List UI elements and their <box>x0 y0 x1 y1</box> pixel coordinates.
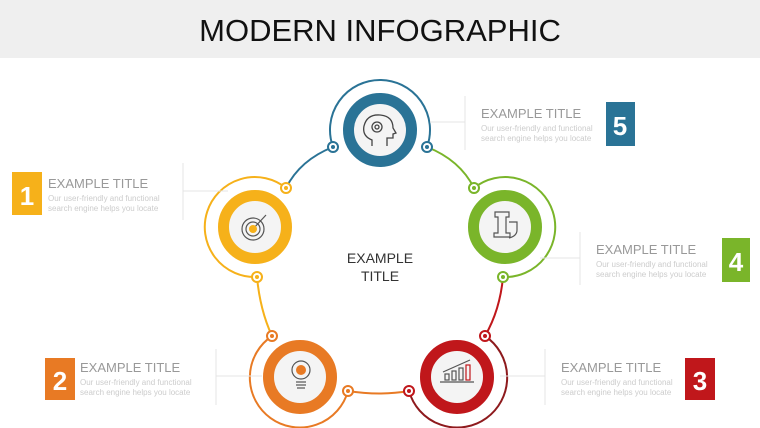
icon: bar chart <box>440 360 474 382</box>
text block 2: EXAMPLE TITLE <box>80 360 181 375</box>
text block 3: EXAMPLE TITLE <box>561 360 662 375</box>
text block 3: 3 <box>693 366 707 396</box>
text block 2: search engine helps you locate <box>80 388 191 397</box>
icon: target <box>242 215 266 240</box>
icon: chess rook <box>494 212 517 238</box>
text block 5: 5 <box>613 111 627 141</box>
title bar: MODERN INFOGRAPHIC <box>199 13 561 48</box>
text block 3: search engine helps you locate <box>561 388 672 397</box>
text block 4: EXAMPLE TITLE <box>596 242 697 257</box>
text block 4 <box>540 232 750 285</box>
center text: EXAMPLE <box>347 250 413 266</box>
text block 3 <box>500 349 715 405</box>
text block 2 <box>45 349 262 405</box>
text block 4: search engine helps you locate <box>596 270 707 279</box>
step 4 node: green <box>469 177 555 282</box>
text block 1 <box>12 163 228 220</box>
text block 1: Our user-friendly and functional <box>48 194 160 203</box>
text block 5 <box>430 96 635 150</box>
title bar <box>0 0 760 58</box>
center text <box>347 250 413 284</box>
icon: head with gear <box>364 115 396 146</box>
step 5 node: blue <box>328 80 432 162</box>
text block 5: Our user-friendly and functional <box>481 124 593 133</box>
step 2 node: orange <box>250 331 353 428</box>
text block 3: Our user-friendly and functional <box>561 378 673 387</box>
text block 5: EXAMPLE TITLE <box>481 106 582 121</box>
text block 4: 4 <box>729 247 744 277</box>
text block 2: 2 <box>53 366 67 396</box>
icon: light bulb <box>292 361 310 388</box>
text block 1: search engine helps you locate <box>48 204 159 213</box>
text block 2: Our user-friendly and functional <box>80 378 192 387</box>
step 3 node: red <box>404 331 507 428</box>
text block 1: 1 <box>20 181 34 211</box>
text block 4: Our user-friendly and functional <box>596 260 708 269</box>
connector lines <box>257 147 503 394</box>
text block 1: EXAMPLE TITLE <box>48 176 149 191</box>
step 1 node: yellow <box>205 177 291 282</box>
center text: TITLE <box>361 268 399 284</box>
text block 5: search engine helps you locate <box>481 134 592 143</box>
